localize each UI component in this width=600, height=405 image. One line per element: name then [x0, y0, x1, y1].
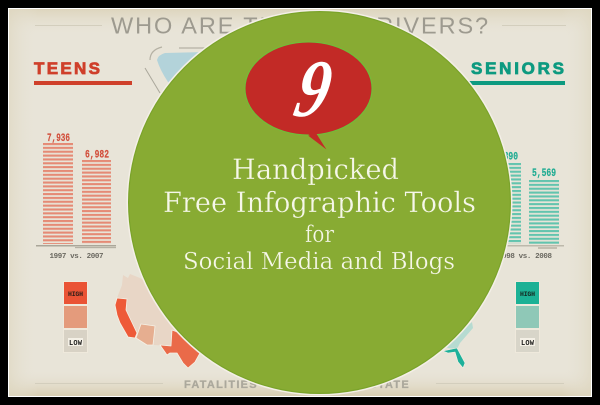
seniors bar chart: 6,890 [494, 152, 518, 164]
teens bar chart: 1997 vs. 2007 [50, 253, 104, 261]
seniors bar chart: 1998 vs. 2008 [498, 253, 552, 261]
numeral 9: 9 [288, 44, 340, 135]
heading: who are the drivers: WHO ARE THE [111, 12, 296, 38]
seniors heading: SENIORS [471, 59, 564, 78]
center map top fragment [145, 47, 205, 93]
title text: Free Infographic Tools [163, 186, 476, 219]
legend: teens [63, 281, 88, 353]
title text: Social Media and Blogs [183, 249, 455, 275]
teens bar chart: 7,936 [47, 133, 70, 145]
title text: for [305, 222, 334, 248]
heading: who are the drivers [35, 12, 566, 38]
teens bar chart [36, 133, 116, 261]
map: western states [115, 274, 205, 368]
seniors bar chart [490, 152, 564, 261]
teens heading [34, 59, 132, 85]
teens heading: TEENS [34, 59, 100, 78]
title text: Handpicked [232, 153, 399, 186]
footer heading: fatalities by state: FATALITIES [184, 379, 258, 391]
footer heading: fatalities by state: STATE [369, 379, 410, 391]
green circle [126, 10, 512, 396]
legend: seniors: HIGH [520, 291, 535, 298]
speech bubble with number 9 [244, 42, 372, 150]
legend: seniors: LOW [521, 340, 535, 348]
teens bar chart: 6,982 [85, 150, 109, 162]
map: florida and southeast [443, 322, 473, 368]
legend: teens: HIGH [68, 291, 83, 298]
title text [163, 153, 476, 275]
footer heading: fatalities by state [35, 379, 564, 391]
legend: teens: LOW [69, 340, 83, 348]
heading: who are the drivers: DRIVERS? [357, 12, 490, 38]
seniors bar chart: 5,569 [532, 168, 556, 180]
legend: seniors [515, 281, 540, 353]
seniors heading [465, 59, 565, 85]
